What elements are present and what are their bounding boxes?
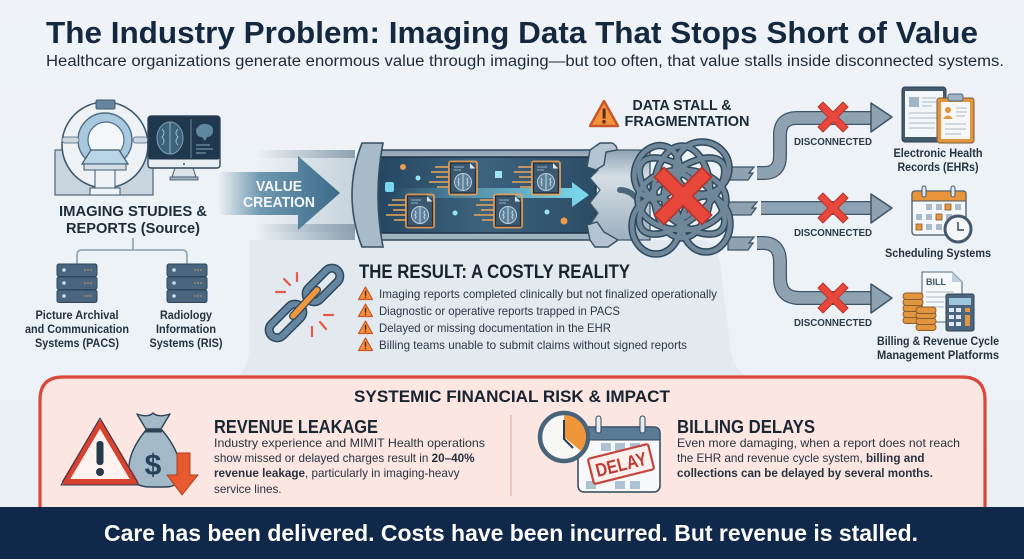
disconnected pipe: billing	[728, 237, 892, 313]
icon: clock and delay calendar	[540, 413, 660, 492]
icon: billing and calculator: BILL	[926, 277, 946, 287]
subtitle: Healthcare organizations generate enormous value through imaging—but too often, that value stalls inside disconnected systems.	[46, 53, 1004, 70]
label: RIS: Radiology	[160, 310, 213, 322]
broken pipe end	[587, 143, 650, 247]
heading: revenue leakage: REVENUE LEAKAGE	[214, 417, 378, 437]
label: RIS: Systems (RIS)	[150, 338, 223, 350]
text: billing delays: the EHR and revenue cycle system,	[677, 452, 866, 465]
panel: result background	[235, 240, 760, 378]
result list: Diagnostic or operative reports trapped in PACS	[379, 304, 620, 318]
text: billing delays: Even more damaging, when a report does not reach	[677, 437, 960, 450]
icon: electronic health records	[902, 87, 974, 143]
report documents	[386, 162, 560, 228]
result list: Imaging reports completed clinically but not finalized operationally	[379, 287, 717, 301]
label: PACS: Systems (PACS)	[35, 338, 119, 350]
label: scheduling: Scheduling Systems	[885, 248, 991, 260]
text: billing delays: billing and	[866, 452, 924, 465]
label: disconnected 1: DISCONNECTED	[794, 137, 872, 148]
text: revenue leakage: service lines.	[214, 483, 282, 496]
text: revenue leakage: revenue leakage	[214, 467, 305, 480]
icon: monitor with brain scan	[148, 116, 220, 180]
label: imaging source: IMAGING STUDIES &	[59, 203, 207, 220]
heading: financial risk: SYSTEMIC FINANCIAL RISK & IMPACT	[354, 388, 670, 406]
bottom banner	[0, 507, 1024, 559]
result list	[358, 287, 717, 352]
result list: Delayed or missing documentation in the EHR	[379, 321, 611, 335]
icon: clock and delay calendar: DELAY	[594, 449, 649, 482]
label: data stall: FRAGMENTATION	[624, 113, 750, 130]
text: revenue leakage: , particularly in imaging-heavy	[305, 467, 460, 480]
label: EHR: Electronic Health	[894, 148, 982, 160]
icon: RIS server	[167, 264, 207, 302]
label: data stall: DATA STALL &	[632, 97, 732, 114]
text: billing delays: collections can be delayed by several months.	[677, 467, 933, 480]
knot with red cross	[627, 139, 737, 254]
text: revenue leakage: Industry experience and MIMIT Health operations	[214, 437, 485, 450]
pipe flange left	[352, 143, 383, 247]
disconnected pipe: scheduling	[728, 193, 892, 223]
label: disconnected 3: DISCONNECTED	[794, 318, 872, 329]
icon: imaging scanner	[55, 100, 153, 195]
arrow: value creation: CREATION	[243, 195, 315, 211]
text: revenue leakage: 20–40%	[432, 452, 475, 465]
icon: broken chain	[266, 265, 343, 341]
label: RIS: Information	[156, 324, 216, 336]
pipe with data flow	[352, 143, 596, 247]
bottom banner: Care has been delivered. Costs have been incurred. But revenue is stalled.	[104, 520, 918, 546]
arrow: value creation: VALUE	[256, 179, 302, 195]
disconnected pipe: EHR	[728, 102, 892, 180]
panel: financial risk	[40, 377, 985, 520]
connector tree	[77, 238, 187, 264]
result list: Billing teams unable to submit claims without signed reports	[379, 338, 687, 352]
heading: the result: THE RESULT: A COSTLY REALITY	[359, 262, 630, 283]
divider	[510, 415, 512, 496]
icon: scheduling calendar	[912, 186, 971, 242]
pipe stub behind arrow	[255, 150, 355, 240]
label: disconnected 2: DISCONNECTED	[794, 228, 872, 239]
flow arrow	[390, 182, 589, 207]
label: imaging source: REPORTS (Source)	[66, 220, 200, 237]
title: The Industry Problem: Imaging Data That Stops Short of Value	[46, 15, 978, 50]
icon: warning and money bag	[61, 413, 198, 495]
icon: warning and money bag: $	[145, 449, 162, 482]
warning icon	[590, 101, 618, 126]
heading: billing delays: BILLING DELAYS	[677, 417, 815, 437]
arrow: value creation	[218, 156, 340, 230]
text: revenue leakage: show missed or delayed charges result in	[214, 452, 432, 465]
icon: billing and calculator	[903, 272, 974, 331]
label: PACS: Picture Archival	[36, 310, 118, 322]
label: EHR: Records (EHRs)	[898, 162, 979, 174]
label: billing platforms: Management Platforms	[877, 350, 999, 362]
icon: PACS server	[57, 264, 97, 302]
label: billing platforms: Billing & Revenue Cycle	[877, 336, 999, 348]
label: PACS: and Communication	[25, 324, 129, 336]
light particles	[385, 164, 568, 224]
